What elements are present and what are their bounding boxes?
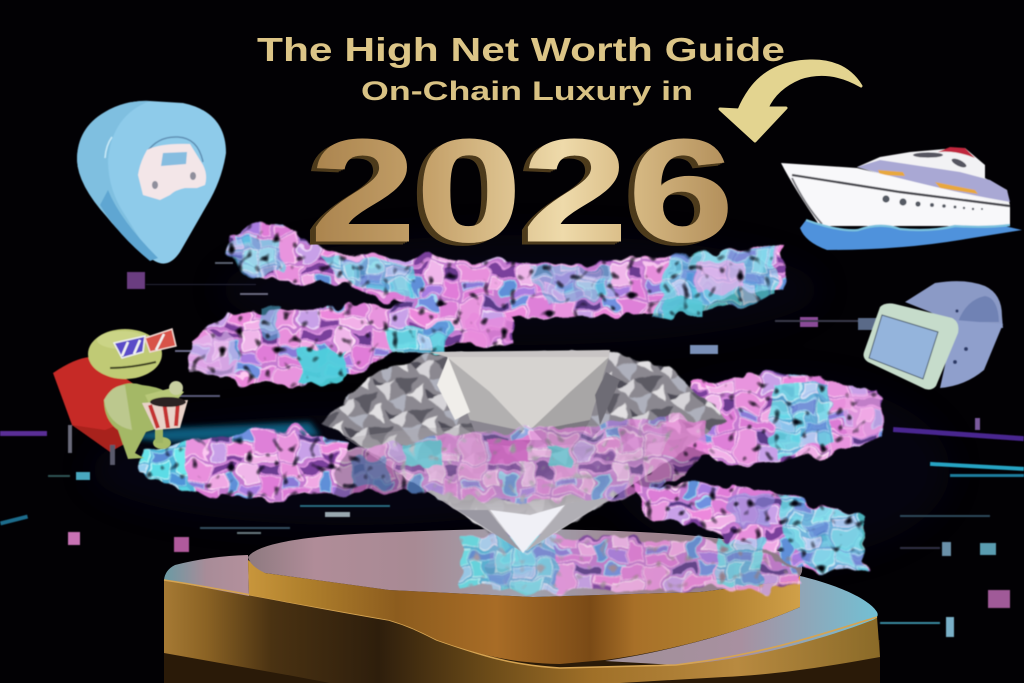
diamond culet highlights (458, 498, 608, 553)
data streaks and stray particles (0, 262, 1024, 637)
heading line one: The High Net Worth Guide (257, 31, 785, 68)
icon: car (138, 137, 206, 200)
diamond: mottled silhouette (322, 352, 728, 553)
particle band: right ribbon (684, 372, 884, 466)
red seat (53, 357, 150, 450)
icon: turtle on cinema seat with popcorn (53, 329, 188, 465)
turtle head (88, 329, 162, 379)
watch lower strap (940, 320, 1003, 388)
particle band: reflection on pedestal (460, 534, 800, 593)
watch case (864, 303, 958, 390)
particle band: second ribbon (190, 301, 514, 386)
yacht water (800, 220, 1022, 250)
watch screen (869, 315, 938, 379)
heading line two: On-Chain Luxury in (361, 76, 693, 106)
faint background glow (90, 235, 950, 560)
icon: luxury yacht (781, 147, 1022, 250)
pedestal (164, 529, 880, 683)
diamond: pavilion shading (345, 425, 705, 553)
pedestal: upper gold side (248, 560, 800, 664)
turtle body (104, 383, 178, 459)
diamond (322, 350, 728, 553)
pedestal: lower disc left surface (164, 555, 249, 596)
pedestal: lower gold side (164, 580, 880, 683)
particle band: upper ribbon (228, 222, 785, 318)
arrow: curved pointer (720, 61, 861, 141)
title (257, 31, 785, 272)
pedestal: upper disc top surface (248, 529, 802, 597)
particle band: in front of diamond (335, 414, 712, 504)
pedestal: lower disc rim line (164, 580, 877, 668)
yacht superstructure (857, 148, 1010, 206)
watch upper strap (905, 281, 1003, 328)
watch strap holes (953, 309, 968, 364)
yacht hull (781, 163, 1010, 226)
particle band: lower-left ribbon behind diamond (140, 427, 345, 501)
pedestal: lower disc right surface (605, 575, 878, 665)
diamond: central table facets (430, 350, 620, 446)
particle band: lower-right ribbon (634, 484, 866, 574)
pedestal: base shadow (164, 640, 880, 683)
blue streak above lower ribbon (110, 422, 320, 442)
popcorn bucket (142, 381, 188, 430)
watch strap inner shadow (958, 296, 999, 322)
icon: smartwatch (864, 281, 1003, 390)
year 2026: 2026 (310, 109, 734, 272)
3D glasses (114, 329, 176, 358)
icon: blue location pin with car (77, 101, 226, 264)
